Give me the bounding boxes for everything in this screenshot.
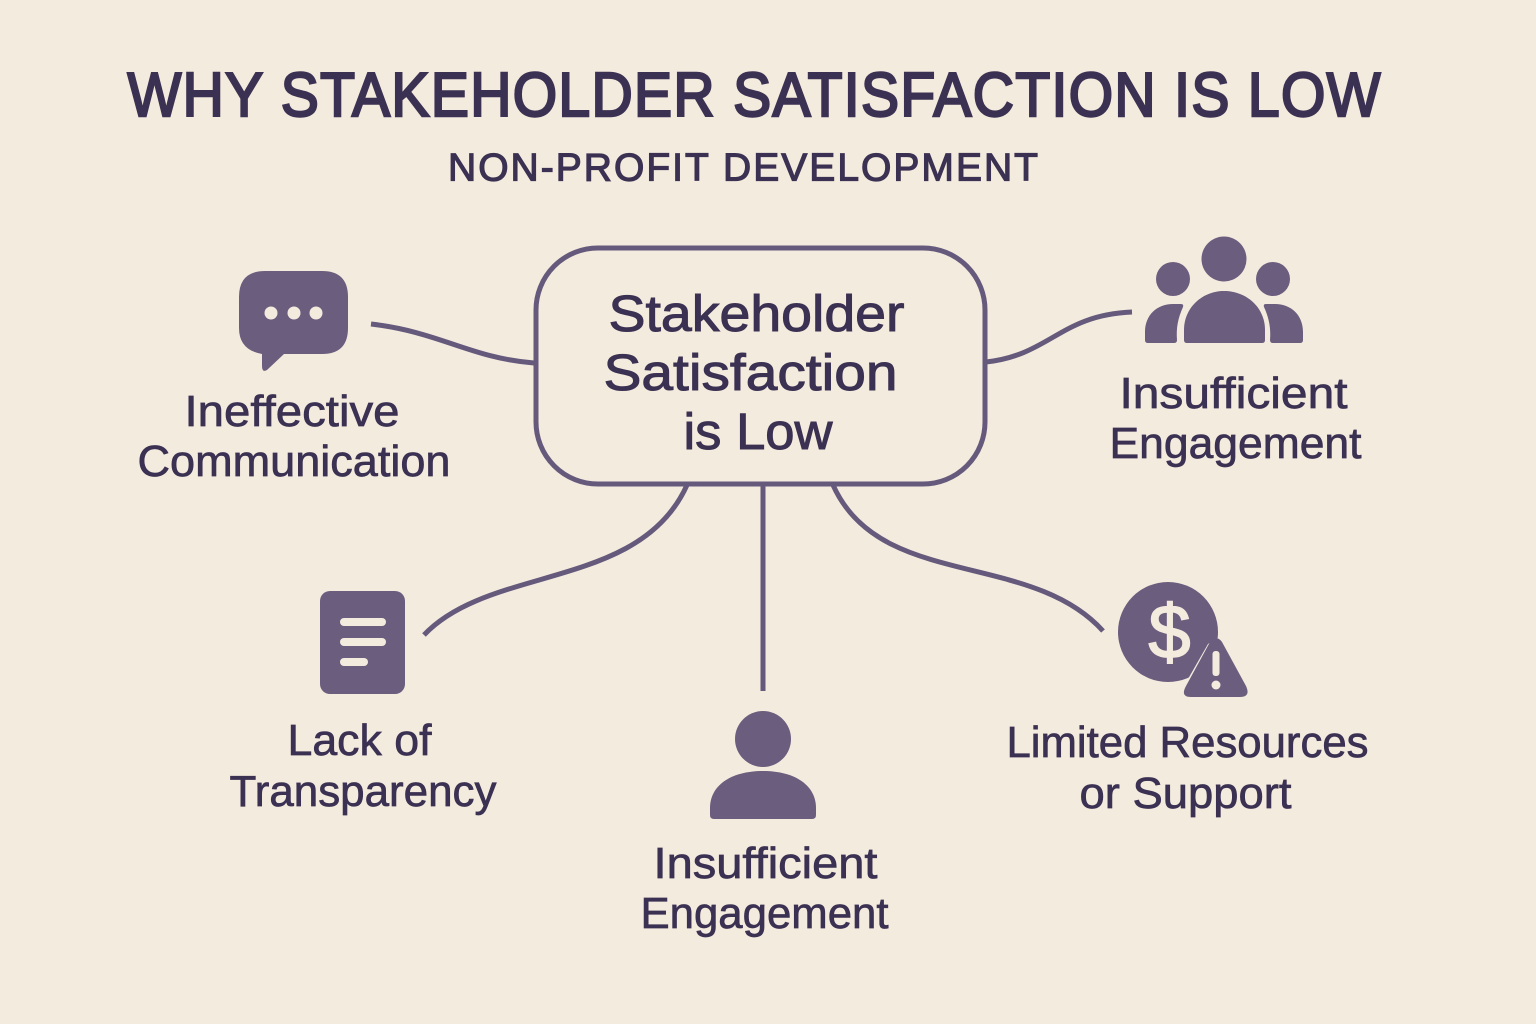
label: limited resources or support: Limited Resources [1006,718,1368,767]
icon: dollar and warning: $ [1148,590,1191,675]
subtitle: NON-PROFIT DEVELOPMENT [448,146,1038,190]
label: lack of transparency: Lack of [288,716,432,765]
label: insufficient engagement centre [640,839,888,938]
central box: Stakeholder [608,285,905,342]
label: lack of transparency [230,716,496,816]
title: WHY STAKEHOLDER SATISFACTION IS LOW [127,60,1381,130]
connector: bottom right [833,485,1103,631]
label: insufficient engagement right: Engagement [1110,419,1362,468]
connector: bottom centre [760,485,766,691]
label: limited resources or support [1006,718,1368,818]
icon: person [710,711,816,819]
label: ineffective communication: Ineffective [184,387,400,436]
label: ineffective communication [138,387,450,486]
central box [536,248,985,484]
label: limited resources or support: or Support [1080,769,1292,818]
icon: group of people [1145,236,1303,343]
connector: bottom left [424,485,687,635]
label: lack of transparency: Transparency [230,767,496,816]
label: insufficient engagement centre: Insufficient [654,839,878,888]
label: insufficient engagement centre: Engagement [640,889,888,938]
central box: Satisfaction [604,344,898,401]
label: insufficient engagement right [1110,369,1362,468]
icon: document [320,591,405,694]
central box: is Low [684,403,833,460]
label: ineffective communication: Communication [138,437,450,486]
label: insufficient engagement right: Insufficient [1120,369,1348,418]
connector: top right [986,312,1132,362]
icon: speech bubble [239,271,348,371]
connector: top left [371,324,534,363]
icon: dollar and warning [1118,582,1262,700]
